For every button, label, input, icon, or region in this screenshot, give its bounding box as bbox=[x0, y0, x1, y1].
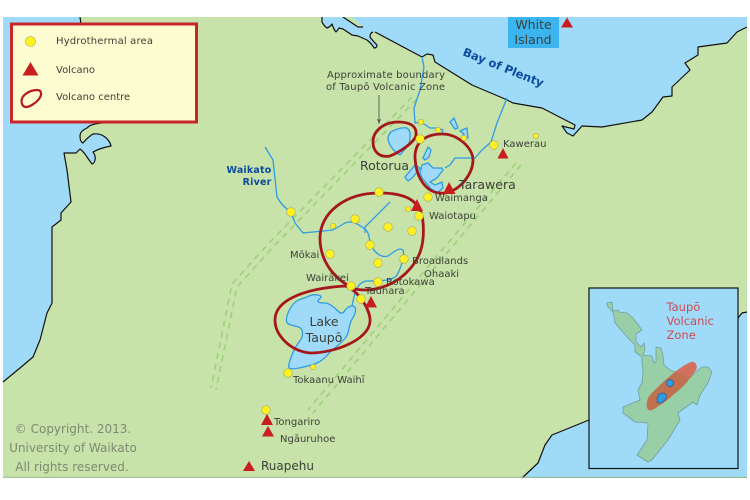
inset: North Island bbox=[607, 302, 712, 462]
copyright text: University of Waikato bbox=[9, 441, 137, 455]
lakes bbox=[286, 118, 468, 369]
inset label: Taupō Volcanic Zone bbox=[666, 300, 714, 342]
lake: Okataina bbox=[423, 147, 431, 160]
lake: Rerewhakaaitu bbox=[405, 165, 420, 181]
place names: Tongariro bbox=[273, 417, 320, 428]
volcano centre: central bbox=[320, 193, 423, 290]
place names: Tokaanu Waihī bbox=[292, 375, 365, 386]
volcanoes bbox=[243, 148, 508, 471]
label: boundary annotation bbox=[326, 70, 445, 93]
inset: offshore part of zone bbox=[675, 362, 697, 378]
label: boundary annotation: Approximate boundary bbox=[327, 70, 445, 81]
volcano centre: Taupō bbox=[275, 286, 370, 353]
place names: Rotorua bbox=[360, 158, 409, 173]
legend text: volcano: Volcano bbox=[56, 65, 95, 76]
legend text: volcano centre: Volcano centre bbox=[56, 92, 130, 103]
volcano centres bbox=[275, 122, 473, 353]
inset label: Taupō Volcanic Zone: Taupō bbox=[666, 300, 700, 314]
place names: Broadlands bbox=[412, 256, 468, 267]
inset label: Taupō Volcanic Zone: Volcanic bbox=[666, 314, 714, 328]
inset label: Taupō Volcanic Zone: Zone bbox=[666, 328, 696, 342]
lake: Taupō bbox=[286, 295, 356, 369]
legend text: hydrothermal area: Hydrothermal area bbox=[56, 36, 153, 47]
copyright text bbox=[9, 422, 137, 474]
place names: Mōkai bbox=[290, 250, 319, 261]
lake: Tarawera bbox=[420, 163, 443, 193]
inset: Taupō Volcanic Zone shape bbox=[647, 362, 697, 410]
label: Waikato River: Waikato bbox=[226, 165, 272, 176]
place names: Ohaaki bbox=[424, 269, 459, 280]
label: Waikato River bbox=[226, 165, 272, 188]
label: White Island: White bbox=[515, 17, 552, 32]
place names: Tauhara bbox=[364, 286, 405, 297]
place names bbox=[261, 139, 546, 473]
label: Waikato River: River bbox=[243, 177, 272, 188]
hydrothermal areas bbox=[262, 119, 539, 414]
legend icon: volcano centre bbox=[22, 90, 41, 107]
legend icon: volcano bbox=[22, 62, 38, 76]
place names: Tarawera bbox=[458, 177, 516, 192]
place names: Waimanga bbox=[435, 193, 488, 204]
label: White Island bbox=[508, 17, 559, 48]
copyright text: All rights reserved. bbox=[15, 460, 129, 474]
label: boundary annotation: of Taupō Volcanic Zone bbox=[326, 82, 445, 93]
south-east sea bbox=[522, 288, 747, 478]
place names: Kawerau bbox=[503, 139, 546, 150]
inset map bbox=[589, 288, 738, 468]
legend icon: hydrothermal area bbox=[26, 36, 36, 46]
icon: White Island volcano bbox=[561, 18, 573, 28]
rivers bbox=[265, 57, 507, 306]
lake: Rotoiti group bbox=[450, 118, 468, 138]
boundary of Taupō Volcanic Zone bbox=[211, 97, 521, 413]
place names: Wairākei bbox=[306, 273, 349, 284]
place names: Waiotapu bbox=[429, 211, 476, 222]
label: Lake Taupō: Lake bbox=[309, 314, 339, 329]
place names: Ruapehu bbox=[261, 459, 314, 473]
inset: lake Taupō bbox=[657, 393, 666, 403]
place names: Rotokawa bbox=[386, 277, 435, 288]
north sea: Bay of Plenty bbox=[322, 17, 747, 136]
legend bbox=[12, 24, 196, 122]
label: Lake Taupō: Taupō bbox=[305, 330, 342, 345]
west coast sea bbox=[3, 17, 111, 382]
label: Bay of Plenty: Bay of Plenty bbox=[461, 45, 546, 90]
place names: Ngāuruhoe bbox=[280, 434, 335, 445]
arrow: boundary pointer bbox=[378, 95, 380, 123]
inset: lake Rotorua bbox=[666, 380, 674, 386]
lake: Rotorua bbox=[388, 128, 410, 155]
copyright text: © Copyright. 2013. bbox=[15, 422, 131, 436]
label: White Island: Island bbox=[514, 32, 552, 47]
volcano centre: Rotorua bbox=[373, 122, 416, 156]
label: Lake Taupō bbox=[305, 314, 342, 345]
volcano centre: Tarawera bbox=[415, 134, 473, 193]
